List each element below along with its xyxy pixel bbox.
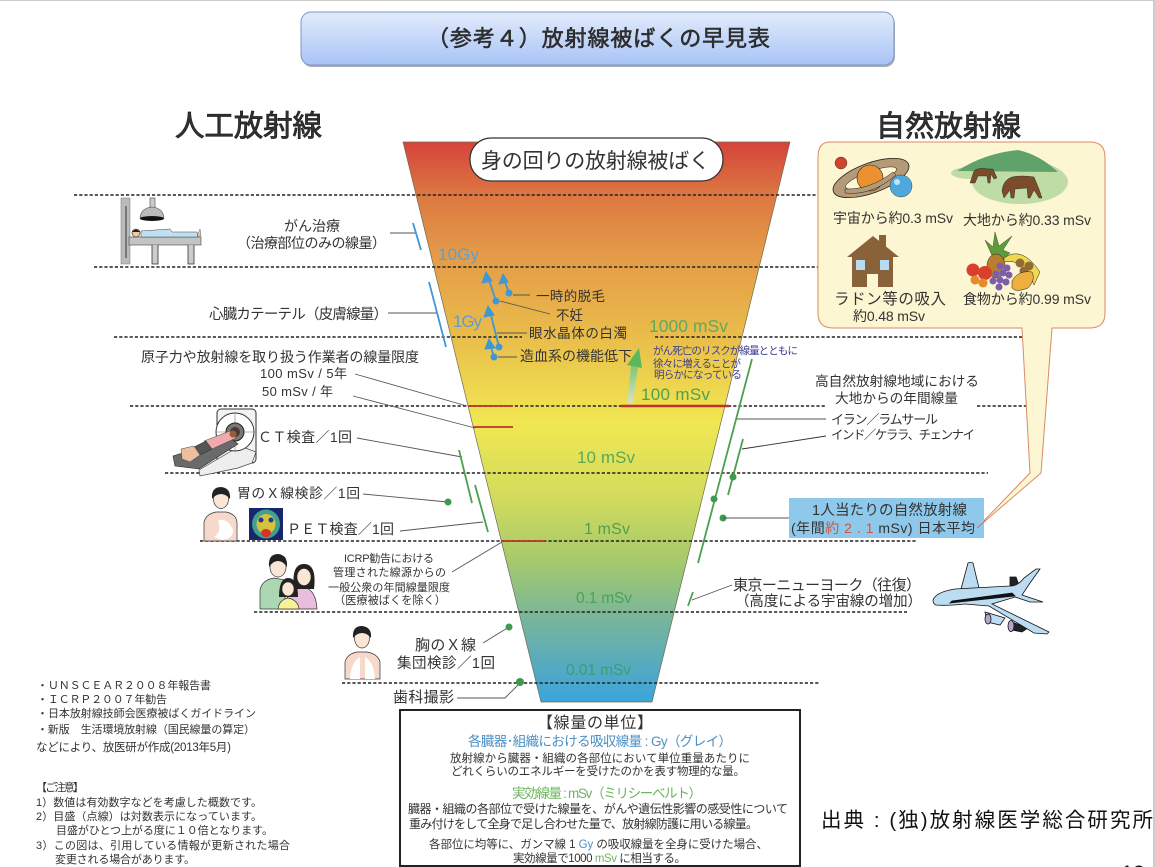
scale value labels: 0.1 mSv	[576, 590, 632, 607]
cancer risk arrow	[627, 348, 642, 403]
label: chest X-ray: 胸のＸ線	[415, 637, 476, 654]
scale value labels: 100 mSv	[641, 385, 710, 404]
label: high natural radiation areas: 高自然放射線地域における	[815, 373, 979, 389]
text: notes: 変更される場合があります。	[55, 852, 195, 866]
blood, lens, infertility and hair loss thresholds: 不妊	[556, 308, 583, 323]
text: gray to sievert conversion: 各部位に均等に、ガンマ線 1 Gy の吸収線量を全身に受けた場合、	[429, 837, 768, 851]
label: CT exam: ＣＴ検査／1回	[258, 429, 352, 445]
text: absorbed dose: 各臓器･組織における吸収線量 : Gy（グレイ）	[468, 734, 732, 749]
text: radon dose	[834, 290, 946, 324]
dose limit red markers	[468, 406, 729, 541]
cancer risk note	[653, 344, 798, 381]
cancer risk note: 明らかになっている	[654, 369, 742, 381]
label: ICRP public dose limit: 一般公衆の年間線量限度	[328, 580, 450, 594]
text: radon dose: 約0.48 mSv	[853, 308, 925, 324]
label: occupational dose limits	[141, 349, 475, 428]
label: high natural radiation areas: イラン／ラムサール	[831, 412, 938, 427]
label: CT exam	[258, 429, 472, 503]
scale value labels: 1 mSv	[584, 521, 630, 538]
icon: PET brain scan	[249, 508, 283, 540]
heading: dose units: 【線量の単位】	[537, 714, 653, 732]
panel: dose units	[400, 710, 800, 866]
label: PET exam	[287, 485, 488, 537]
text: notes: 3）この図は、引用している情報が更新された場合	[36, 838, 290, 852]
scale value labels: 10Gy	[438, 245, 480, 264]
pill: everyday radiation exposure	[470, 138, 723, 181]
scale value labels: 1000 mSv	[649, 316, 728, 336]
label: PET exam: ＰＥＴ検査／1回	[287, 521, 394, 537]
funnel dose scale	[403, 142, 790, 702]
text: absorbed dose: どれくらいのエネルギーを受けたのかを表す物理的な量。	[451, 764, 745, 778]
label: dental imaging: 歯科撮影	[393, 688, 454, 706]
label: ICRP public dose limit: （医療被ばくを除く）	[334, 593, 446, 607]
label: cardiac catheter: 心臓カテーテル（皮膚線量）	[209, 306, 388, 323]
text: sources: ・ＩＣＲＰ２００７年勧告	[37, 692, 167, 706]
icon: man with stomach	[204, 487, 237, 541]
label: occupational dose limits: 100 mSv / 5年	[260, 366, 347, 381]
text: effective dose: 重み付けをして全身で足し合わせた量で、放射線防護に用いる線量。	[409, 816, 758, 831]
cancer risk note: がん死亡のリスクが線量とともに	[653, 344, 798, 357]
box: Japan average natural radiation	[789, 498, 985, 538]
scale lines	[74, 195, 1026, 683]
text: sources: ・ＵＮＳＣＥＡＲ２００８年報告書	[37, 678, 211, 692]
scale value labels: 0.01 mSv	[566, 662, 631, 679]
blood, lens, infertility and hair loss thresholds: 一時的脱毛	[536, 289, 605, 304]
title banner	[301, 12, 895, 67]
text: effective dose	[408, 786, 788, 831]
blood, lens, infertility and hair loss thresholds: 眼水晶体の白濁	[529, 326, 627, 341]
label: stomach X-ray	[237, 486, 452, 506]
label: dental imaging	[393, 678, 524, 706]
label: ICRP public dose limit: ICRP勧告における	[344, 551, 434, 565]
label: cardiac catheter	[209, 282, 446, 347]
text: food dose: 食物から約0.99 mSv	[963, 291, 1091, 307]
icon: CT scanner	[173, 409, 256, 476]
blood, lens, infertility and hair loss thresholds	[482, 272, 632, 364]
label: high natural radiation areas	[736, 373, 979, 449]
text: gray to sievert conversion: 実効線量で1000 mSv に相当する。	[513, 851, 686, 865]
label: cancer therapy: がん治療	[284, 218, 340, 234]
box: Japan average natural radiation: (年間約 2 . 1 mSv) 日本平均	[791, 520, 975, 536]
label: cancer therapy	[237, 218, 421, 251]
label: Tokyo to New York flight: 東京ーニューヨーク（往復）	[733, 577, 921, 594]
text: sources: などにより、放医研が作成(2013年5月)	[36, 740, 231, 754]
icon: radiotherapy table	[121, 198, 201, 264]
text: notes	[36, 780, 290, 866]
label: stomach X-ray: 胃のＸ線検診／1回	[237, 486, 360, 501]
title banner: （参考４）放射線被ばくの早見表	[427, 26, 770, 51]
text: effective dose: 実効線量 : mSv（ミリシーベルト）	[512, 786, 702, 801]
scale value labels: 10 mSv	[577, 448, 636, 467]
label: high natural radiation areas: 大地からの年間線量	[835, 391, 958, 406]
icon: house	[847, 235, 899, 287]
text: notes: 1）数値は有効数字などを考慮した概数です。	[36, 795, 262, 809]
text: gray to sievert conversion	[429, 837, 768, 865]
blood, lens, infertility and hair loss thresholds: 造血系の機能低下	[520, 348, 632, 364]
label: Tokyo to New York flight	[688, 577, 922, 610]
pill: everyday radiation exposure: 身の回りの放射線被ばく	[481, 150, 710, 173]
icon: fruit	[966, 232, 1040, 290]
icon: airplane	[933, 562, 1049, 634]
icon: land with horses	[951, 150, 1068, 204]
text: absorbed dose: 放射線から臓器・組織の各部位において単位重量あたりに	[450, 751, 750, 765]
text: absorbed dose	[450, 734, 750, 778]
box: Japan average natural radiation: 1人当たりの自然放射線	[812, 502, 968, 519]
icon: family	[260, 554, 317, 609]
text: radon dose: ラドン等の吸入	[834, 290, 946, 308]
cancer risk note: 徐々に増えることが	[653, 357, 742, 370]
text: cosmic dose: 宇宙から約0.3 mSv	[833, 210, 953, 226]
text: sources	[36, 678, 256, 754]
text: sources: ・新版 生活環境放射線（国民線量の算定）	[37, 722, 255, 736]
text: notes: 目盛がひとつ上がる度に１０倍となります。	[56, 823, 273, 837]
label: ICRP public dose limit: 管理された線源からの	[333, 565, 446, 579]
text: notes: 【ご注意】	[36, 780, 84, 794]
label: occupational dose limits: 原子力や放射線を取り扱う作業者の線量限度	[141, 349, 419, 365]
icon: planets	[828, 150, 914, 206]
label: chest X-ray	[397, 624, 512, 672]
icon: man with lungs	[345, 626, 380, 679]
text: source credit: 出典 : (独)放射線医学総合研究所	[821, 809, 1153, 832]
text: sources: ・日本放射線技師会医療被ばくガイドライン	[37, 706, 256, 720]
label: ICRP public dose limit	[328, 542, 502, 607]
heading: natural radiation: 自然放射線	[876, 110, 1021, 143]
label: Tokyo to New York flight: （高度による宇宙線の増加）	[735, 593, 922, 610]
scale value labels	[438, 245, 728, 679]
heading: artificial radiation: 人工放射線	[175, 110, 322, 143]
natural radiation range bars	[698, 359, 790, 563]
text: terrestrial dose: 大地から約0.33 mSv	[963, 212, 1091, 228]
label: high natural radiation areas: インド／ケララ、チェンナイ	[831, 428, 975, 442]
text: notes: 2）目盛（点線）は対数表示になっています。	[36, 809, 262, 823]
scale value labels: 1Gy	[453, 312, 482, 331]
label: cancer therapy: （治療部位のみの線量）	[237, 235, 386, 251]
callout: natural radiation sources	[818, 142, 1105, 528]
label: occupational dose limits: 50 mSv / 年	[262, 384, 333, 399]
text: effective dose: 臓器・組織の各部位で受けた線量を、がんや遺伝性影響の感受性について	[408, 801, 788, 816]
label: chest X-ray: 集団検診／1回	[397, 655, 495, 672]
